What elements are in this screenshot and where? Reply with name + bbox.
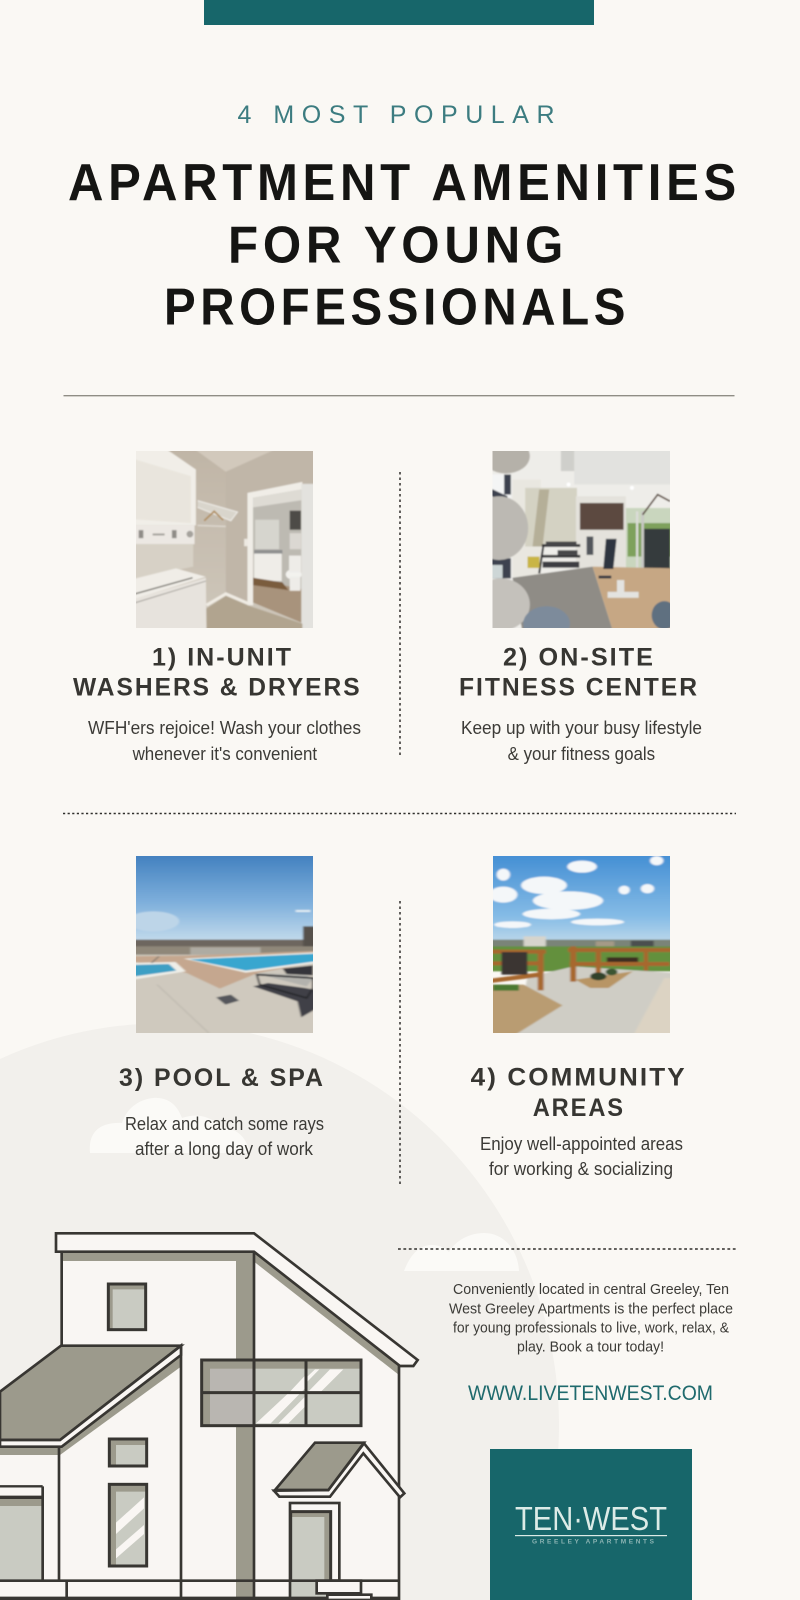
tall window	[109, 1484, 147, 1566]
text: amenity 1 description: whenever it's convenient	[132, 744, 317, 764]
house walls	[0, 1252, 399, 1600]
title	[68, 154, 741, 336]
text: closing paragraph: play. Book a tour today!	[517, 1339, 664, 1356]
porch roof	[274, 1443, 404, 1497]
panel: amenity 2 fitness center	[459, 439, 702, 764]
panel: amenity 3 pool and spa	[119, 848, 325, 1159]
photo: laundry closet	[136, 451, 313, 628]
heading: amenity 4: 4) COMMUNITY	[471, 1064, 687, 1092]
text: amenity 2 description: Keep up with your busy lifestyle	[461, 718, 702, 738]
text: closing paragraph: for young professionals to live, work, relax, &	[453, 1320, 729, 1337]
heading: amenity 4: AREAS	[533, 1094, 625, 1122]
large window	[202, 1360, 361, 1426]
website link: WWW.LIVETENWEST.COM	[468, 1381, 713, 1405]
text: amenity 2 description	[461, 718, 702, 764]
middle window	[109, 1439, 147, 1466]
title: APARTMENT AMENITIES	[68, 154, 741, 212]
photo: pool	[136, 856, 313, 1033]
subtitle: 4 MOST POPULAR	[238, 101, 554, 129]
heading: amenity 2: 2) ON-SITE	[503, 644, 655, 672]
text: amenity 3 description	[125, 1114, 324, 1159]
logo: Ten West: TEN·WEST	[515, 1500, 667, 1537]
upper roof	[56, 1233, 418, 1366]
text: closing paragraph: Conveniently located in central Greeley, Ten	[453, 1281, 729, 1298]
cloud: behind pool text	[90, 1098, 250, 1153]
upper window	[108, 1284, 146, 1330]
heading: amenity 1: 1) IN-UNIT	[152, 644, 293, 672]
text: amenity 2 description: & your fitness goals	[508, 744, 655, 764]
heading: amenity 4	[471, 1064, 687, 1122]
text: amenity 3 description: Relax and catch some rays	[125, 1114, 324, 1134]
logo: Ten West	[490, 1449, 692, 1600]
top bar	[204, 0, 594, 25]
wall shading	[0, 1252, 399, 1600]
heading: amenity 2: FITNESS CENTER	[459, 674, 699, 702]
text: closing paragraph	[449, 1281, 733, 1356]
base and steps	[0, 1581, 399, 1600]
text: amenity 3 description: after a long day of work	[135, 1139, 314, 1159]
text: amenity 4 description: for working & socializing	[489, 1159, 673, 1179]
heading: amenity 1: WASHERS & DRYERS	[73, 674, 362, 702]
text: amenity 1 description	[88, 718, 361, 764]
panel: amenity 4 community areas	[471, 848, 687, 1179]
text: amenity 1 description: WFH'ers rejoice! Wash your clothes	[88, 718, 361, 738]
heading: amenity 3: 3) POOL & SPA	[119, 1064, 325, 1092]
door	[290, 1503, 339, 1581]
heading: amenity 2	[459, 644, 699, 702]
text: amenity 4 description: Enjoy well-appointed areas	[480, 1134, 683, 1154]
text: closing paragraph: West Greeley Apartments is the perfect place	[449, 1300, 733, 1317]
logo: Ten West: GREELEY APARTMENTS	[532, 1538, 655, 1545]
photo: community area	[493, 856, 670, 1033]
illustration: house	[0, 1232, 420, 1600]
panel: amenity 1 washers and dryers	[73, 441, 362, 764]
bottom left window	[0, 1486, 43, 1581]
title: FOR YOUNG	[228, 216, 568, 274]
text: amenity 4 description	[480, 1134, 683, 1179]
lower left roof	[0, 1346, 181, 1447]
background circle	[0, 1023, 559, 1600]
cloud: behind closing text	[404, 1233, 519, 1271]
photo: gym	[492, 451, 670, 628]
heading: amenity 1	[73, 644, 362, 702]
title: PROFESSIONALS	[164, 278, 630, 336]
